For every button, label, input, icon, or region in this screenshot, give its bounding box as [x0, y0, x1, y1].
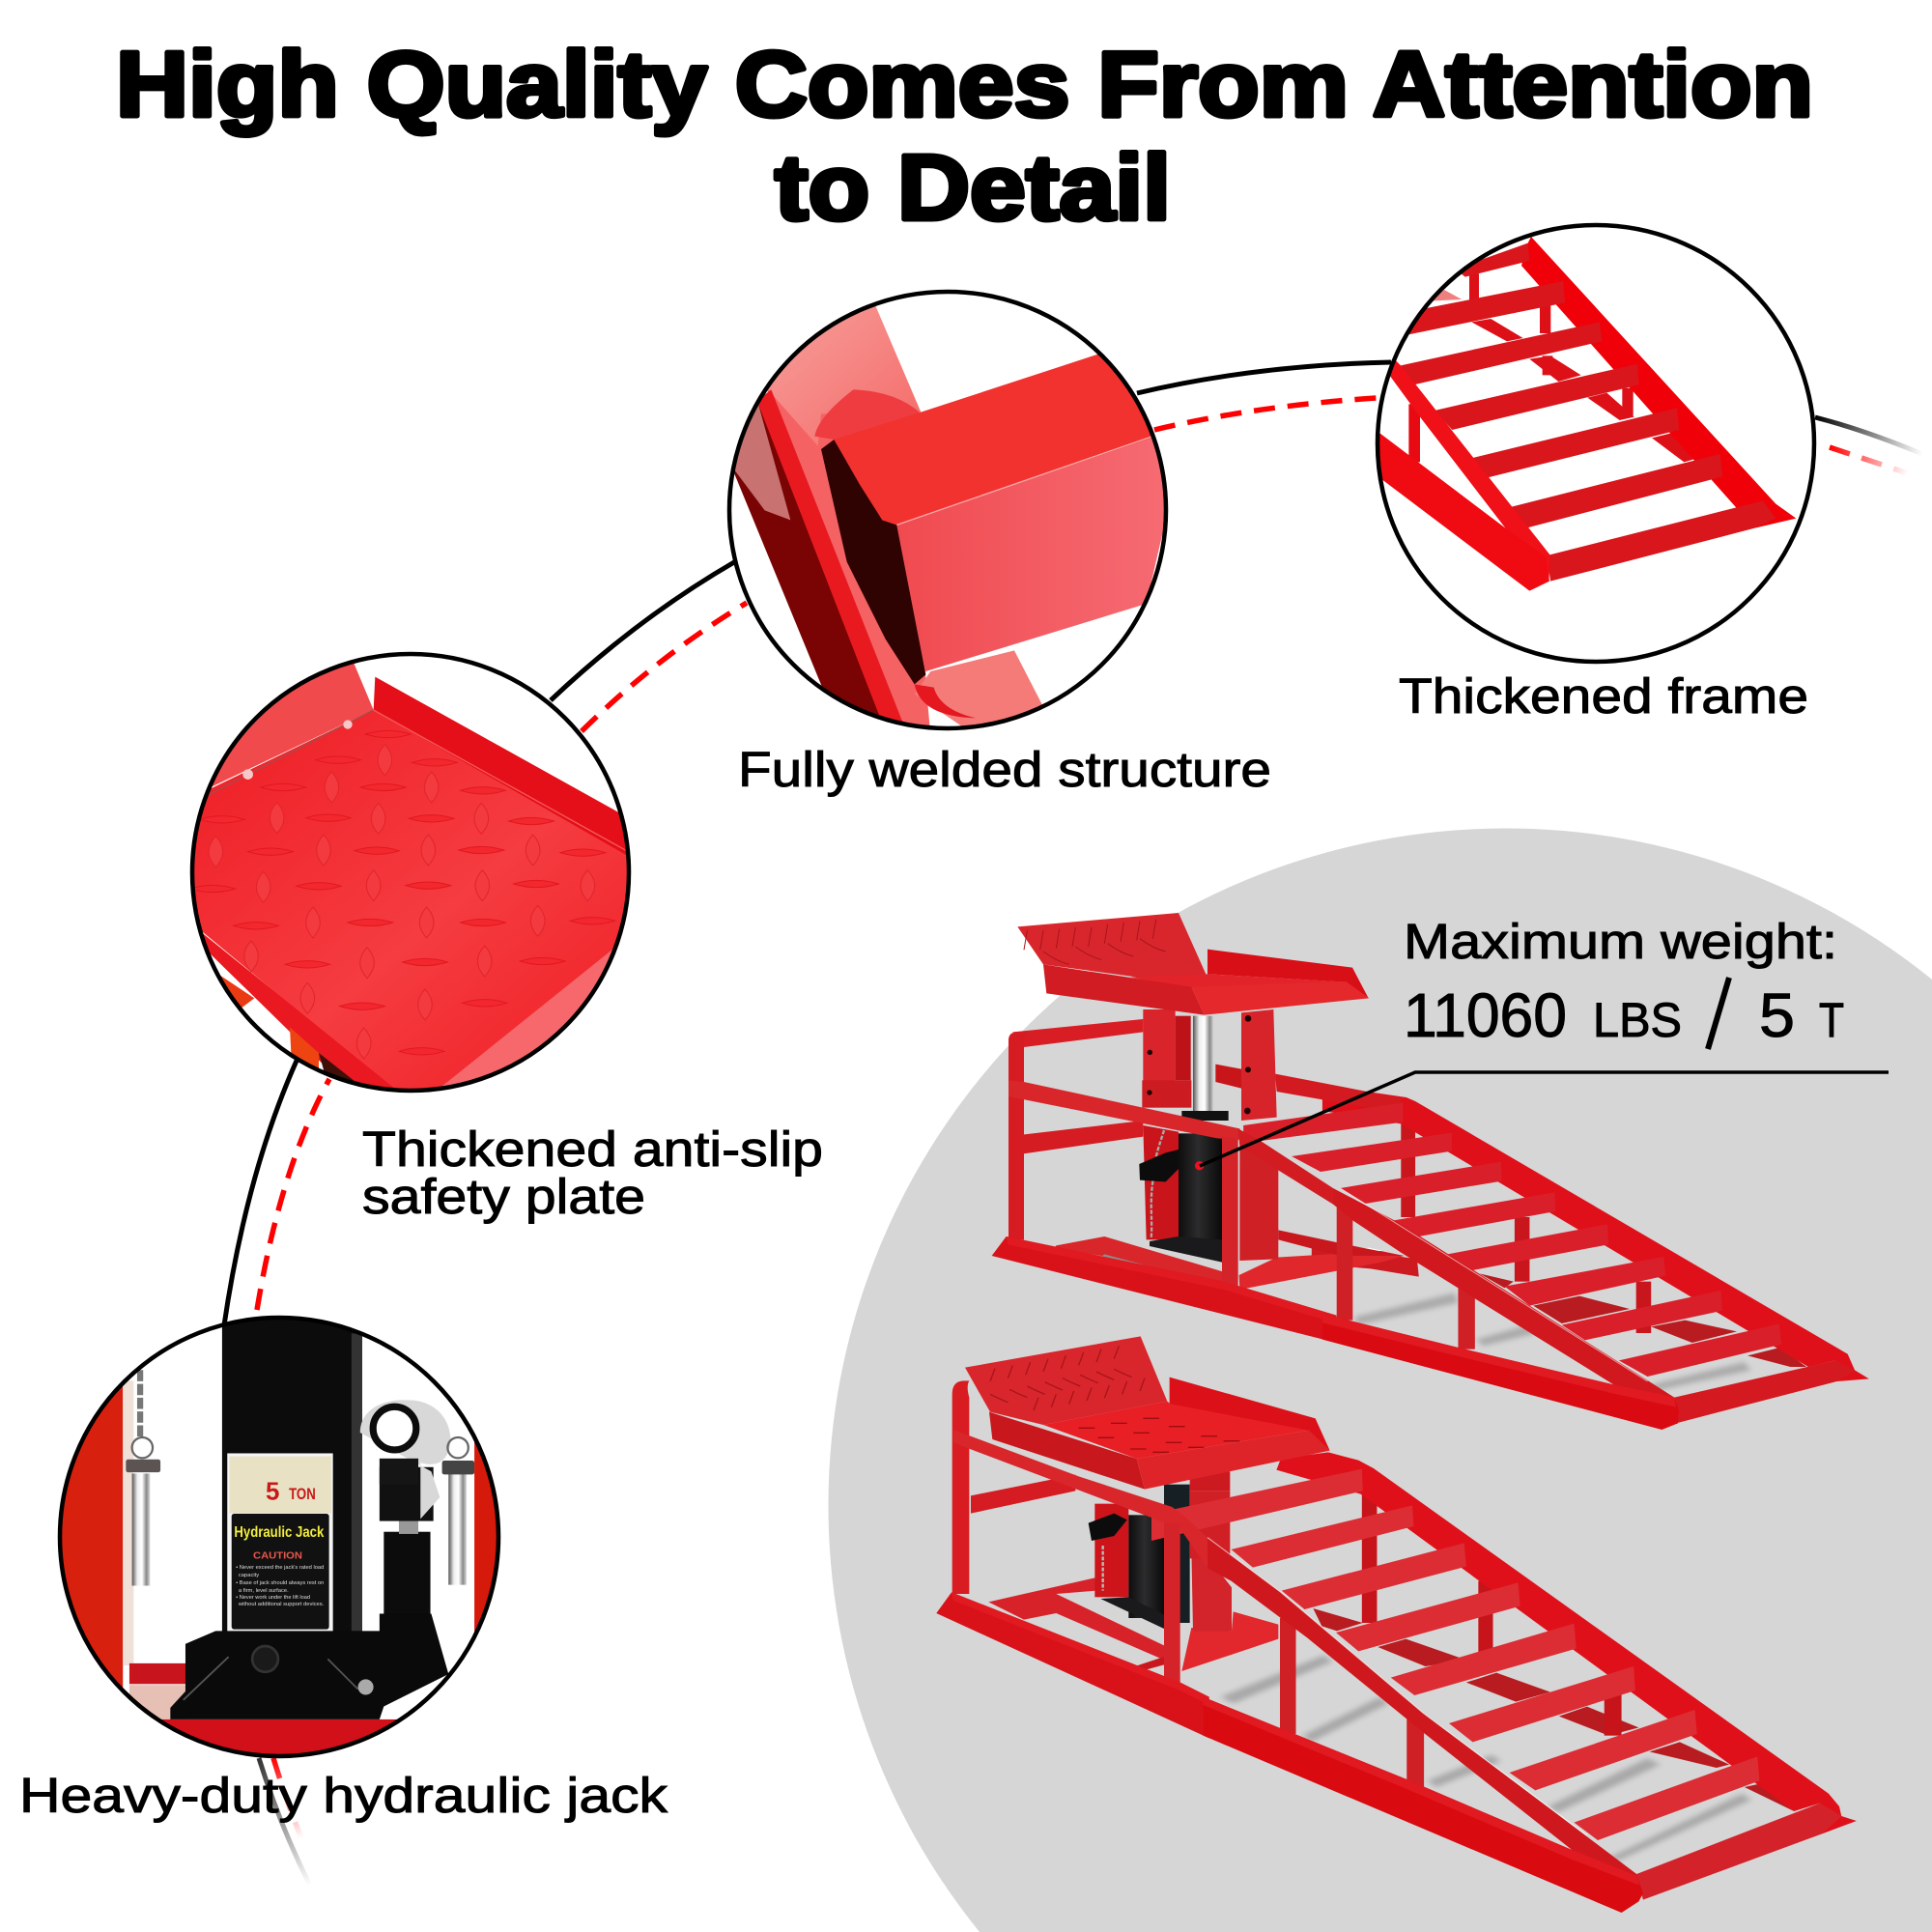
- jack label: without additional support devices.: [238, 1602, 325, 1607]
- jack label: capacity: [239, 1573, 259, 1578]
- jack label: • Base of jack should always rest on: [236, 1580, 324, 1586]
- jack clamp: [360, 1400, 451, 1519]
- product: lower ramp with lowered platform: [936, 1336, 1857, 1913]
- jack label: [227, 1453, 333, 1636]
- jack label: a firm, level surface.: [239, 1588, 289, 1594]
- jack label: • Never work under the lift load: [236, 1595, 310, 1601]
- title: High Quality Comes From Attention: [116, 33, 1813, 136]
- label: anti-slip safety plate: Thickened anti-slip: [362, 1122, 823, 1177]
- jack label: TON: [289, 1485, 316, 1503]
- jack label: 5: [266, 1479, 279, 1506]
- label: fully welded structure: Fully welded structure: [738, 742, 1271, 797]
- leader line to jack: [1200, 1072, 1889, 1166]
- label: max weight: T: [1819, 993, 1844, 1047]
- detail circle: thickened frame: [1372, 223, 1816, 664]
- label: anti-slip safety plate: [362, 1122, 823, 1224]
- jack base: [170, 1467, 448, 1719]
- detail circle: welded structure: [727, 290, 1176, 736]
- label: max weight: Maximum weight:: [1404, 914, 1837, 969]
- detail circle: anti-slip plate: [186, 652, 635, 1094]
- product: upper ramp with raised platform: [992, 913, 1869, 1430]
- label: thickened frame: Thickened frame: [1399, 668, 1808, 724]
- label: hydraulic jack: Heavy-duty hydraulic jack: [19, 1768, 668, 1823]
- jack label: • Never exceed the jack's rated load: [236, 1565, 324, 1571]
- title: to Detail: [775, 136, 1171, 240]
- title: [116, 33, 1813, 240]
- grey backdrop circle: [828, 828, 1932, 1932]
- label: max weight: 5: [1759, 980, 1795, 1050]
- jack label: CAUTION: [253, 1550, 302, 1561]
- locking pins: [126, 1370, 474, 1586]
- label: max weight: 11060: [1404, 980, 1567, 1050]
- label: max weight: LBS: [1593, 993, 1682, 1047]
- jack label: Hydraulic Jack: [234, 1524, 325, 1541]
- label: anti-slip safety plate: safety plate: [362, 1169, 645, 1224]
- label: max weight: [1404, 914, 1844, 1050]
- detail circle: hydraulic jack: [52, 1312, 509, 1763]
- curved connector path: black and red dashed lines: [224, 362, 1922, 1886]
